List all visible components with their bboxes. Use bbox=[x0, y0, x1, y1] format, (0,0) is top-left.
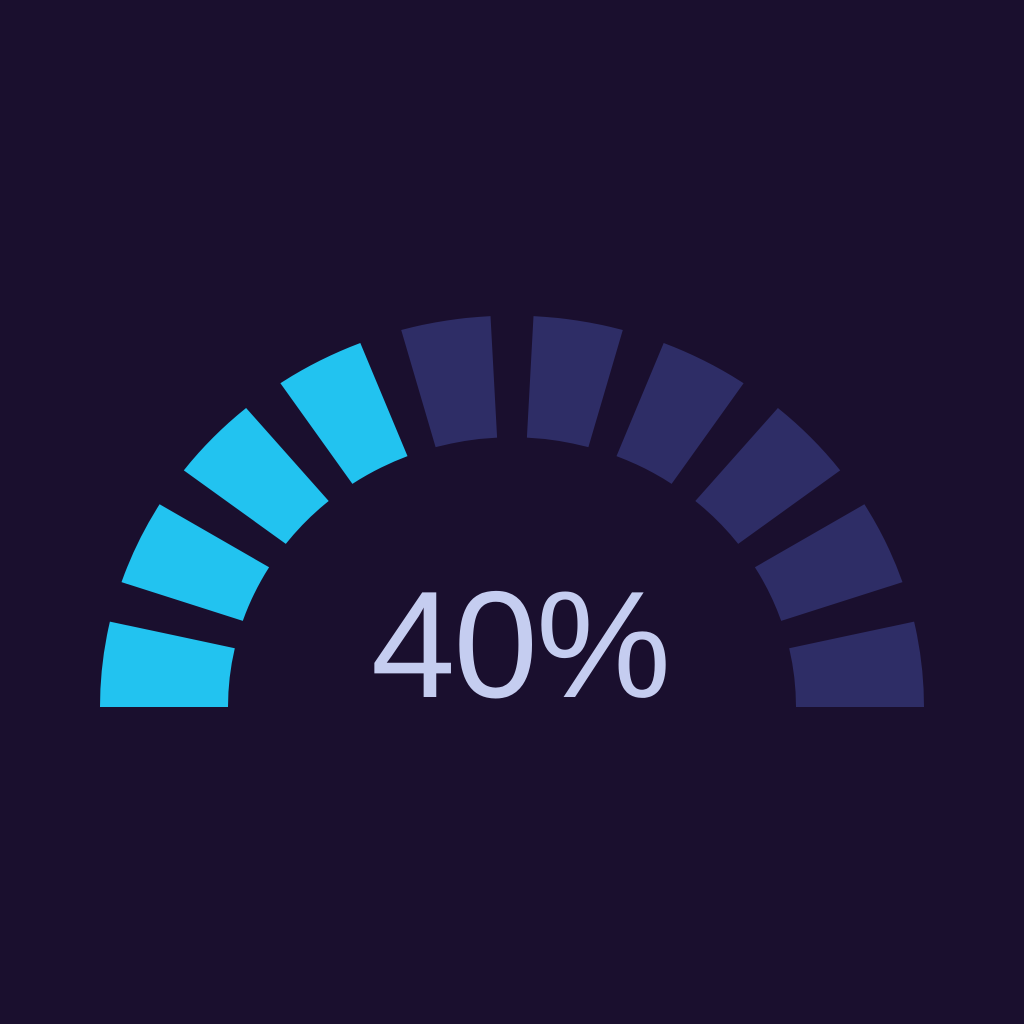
segment 8 (empty) bbox=[695, 408, 840, 544]
segment 1 (filled) bbox=[100, 622, 235, 707]
segment 7 (empty) bbox=[616, 343, 744, 484]
segment 9 (empty) bbox=[755, 504, 902, 621]
segment 4 (filled) bbox=[280, 343, 408, 484]
segment 3 (filled) bbox=[184, 408, 329, 544]
segment 5 (empty) bbox=[401, 316, 497, 447]
percentage label: 40% bbox=[371, 560, 669, 730]
segment 6 (empty) bbox=[527, 316, 623, 447]
segment 2 (filled) bbox=[122, 504, 269, 621]
segment 10 (empty) bbox=[789, 622, 924, 707]
